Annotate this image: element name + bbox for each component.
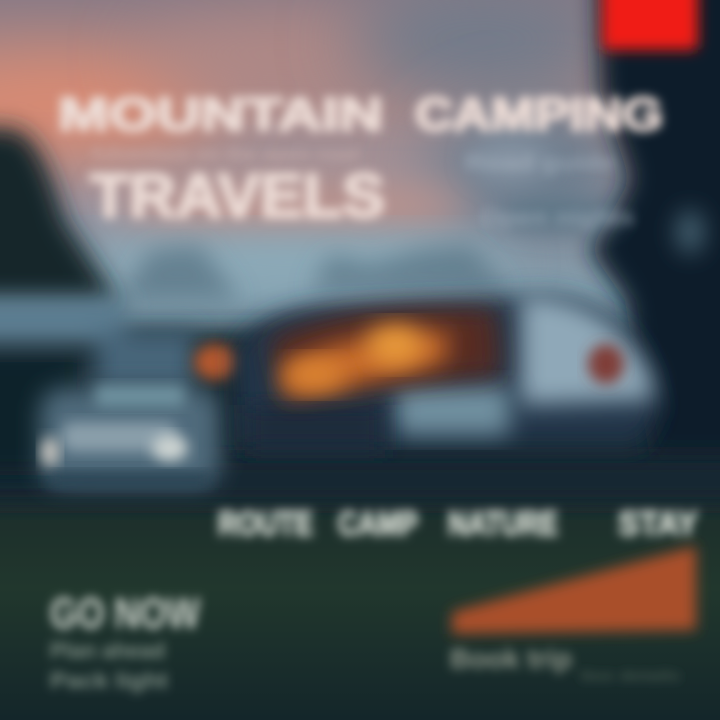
label 4: STAY <box>618 505 698 543</box>
bottom left text block: Pack light <box>50 668 169 693</box>
distant tree line <box>120 245 510 300</box>
ground <box>0 463 720 666</box>
background sky <box>0 0 644 344</box>
dark trees: right <box>590 0 720 460</box>
left vehicle band <box>0 298 195 475</box>
small orange light <box>194 344 238 380</box>
middle dark band behind vehicles <box>0 312 644 360</box>
bottom left details: Plan ahead <box>50 638 165 663</box>
title <box>58 88 663 231</box>
tree highlights: right <box>470 138 704 254</box>
title line 2: CAMPING <box>415 88 663 140</box>
bottom right text <box>450 643 681 683</box>
label 1: ROUTE <box>218 505 313 543</box>
label 3: NATURE <box>448 505 558 543</box>
camper <box>235 295 660 450</box>
red badge <box>602 0 698 50</box>
title line 3: TRAVELS <box>90 162 385 231</box>
bottom left text block <box>50 589 200 693</box>
label 2: CAMP <box>338 505 418 543</box>
title line 1: MOUNTAIN <box>58 88 383 140</box>
bottom left heading: GO NOW <box>50 589 200 638</box>
right caption <box>465 150 635 230</box>
orange banner <box>452 546 696 634</box>
camper glowing window <box>270 308 500 400</box>
right caption: Road guide <box>465 150 615 175</box>
bottom right text: Book trip <box>450 643 572 674</box>
label row <box>218 505 698 543</box>
right caption: Open nights <box>480 205 635 230</box>
dark tree: left <box>0 128 120 305</box>
car <box>40 385 220 488</box>
subtitle: Adventure on the open road <box>90 144 360 164</box>
bottom right text: See details <box>580 669 681 683</box>
